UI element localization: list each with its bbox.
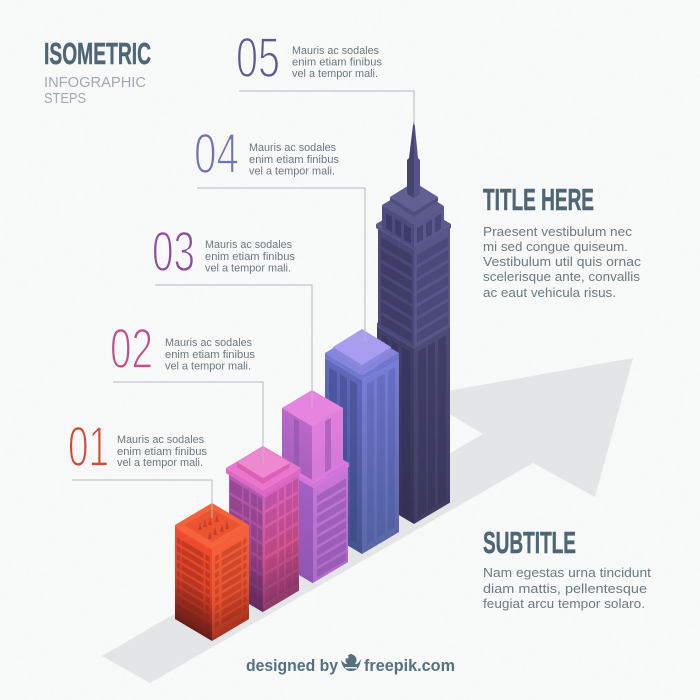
step 05 label: enim etiam finibus xyxy=(292,56,382,68)
subtitle block: SUBTITLE xyxy=(483,525,576,560)
title here block: scelerisque ante, convallis xyxy=(483,269,641,284)
step 03 label: vel a tempor mali. xyxy=(205,262,291,274)
title here block: Vestibulum util quis ornac xyxy=(483,254,642,269)
step 02 label: vel a tempor mali. xyxy=(165,360,251,372)
step 01 label: enim etiam finibus xyxy=(117,446,207,458)
step 03 label: enim etiam finibus xyxy=(205,251,295,263)
step 03 label: 03 xyxy=(152,220,195,284)
step 01 label xyxy=(68,415,212,518)
arrow shadow xyxy=(102,358,633,683)
roof cap xyxy=(333,329,391,370)
step 01 label: Mauris ac sodales xyxy=(117,434,204,446)
title here block: Praesent vestibulum nec xyxy=(483,224,633,239)
step 05 label xyxy=(236,26,414,125)
step 04 label: vel a tempor mali. xyxy=(249,166,335,178)
tower 02: pink building xyxy=(226,446,301,612)
spire xyxy=(407,117,420,198)
rooftop spikes xyxy=(198,514,229,539)
roof cap xyxy=(237,447,290,484)
upper tier and roof xyxy=(382,182,444,248)
step 02 label xyxy=(110,317,263,463)
step 04 label: 04 xyxy=(194,122,239,186)
upper tier xyxy=(282,390,343,480)
step 05 label: vel a tempor mali. xyxy=(292,68,378,80)
title here block: ac eaut vehicula risus. xyxy=(483,285,616,300)
icon: freepik logo xyxy=(341,654,361,671)
tower 03: violet two-tier building xyxy=(282,390,349,583)
footer credit: freepik.com xyxy=(364,656,455,675)
lower section xyxy=(377,301,450,524)
subtitle block: Nam egestas urna tincidunt xyxy=(483,565,651,580)
subtitle block: diam mattis, pellentesque xyxy=(483,581,647,596)
step 02 label: 02 xyxy=(110,317,153,381)
step 01 label: vel a tempor mali. xyxy=(117,457,203,469)
main title xyxy=(44,36,151,107)
footer credit xyxy=(246,654,455,675)
tower 05: dark skyscraper xyxy=(376,117,451,524)
step 03 label xyxy=(152,220,312,407)
step 05 label: Mauris ac sodales xyxy=(292,45,379,57)
main title: INFOGRAPHIC xyxy=(44,75,146,91)
footer credit: designed by xyxy=(246,656,339,675)
step 05 label: 05 xyxy=(236,26,280,90)
subtitle block: feugiat arcu tempor solaro. xyxy=(483,596,645,611)
title here block xyxy=(483,182,642,300)
step 01 label: 01 xyxy=(68,415,109,479)
step 02 label: enim etiam finibus xyxy=(165,349,255,361)
main title: STEPS xyxy=(44,91,86,107)
title here block: mi sed congue quiseum. xyxy=(483,239,628,254)
tower 01: red building xyxy=(175,503,249,641)
step 02 label: Mauris ac sodales xyxy=(165,337,252,349)
title here block: TITLE HERE xyxy=(483,182,594,217)
step 04 label xyxy=(194,122,365,342)
tower 04: blue skyscraper xyxy=(325,329,399,554)
step 03 label: Mauris ac sodales xyxy=(205,239,292,251)
subtitle block xyxy=(483,525,651,611)
step 04 label: Mauris ac sodales xyxy=(249,142,336,154)
middle shaft with floor bands xyxy=(376,202,451,348)
main title: ISOMETRIC xyxy=(44,36,151,71)
step 04 label: enim etiam finibus xyxy=(249,154,339,166)
